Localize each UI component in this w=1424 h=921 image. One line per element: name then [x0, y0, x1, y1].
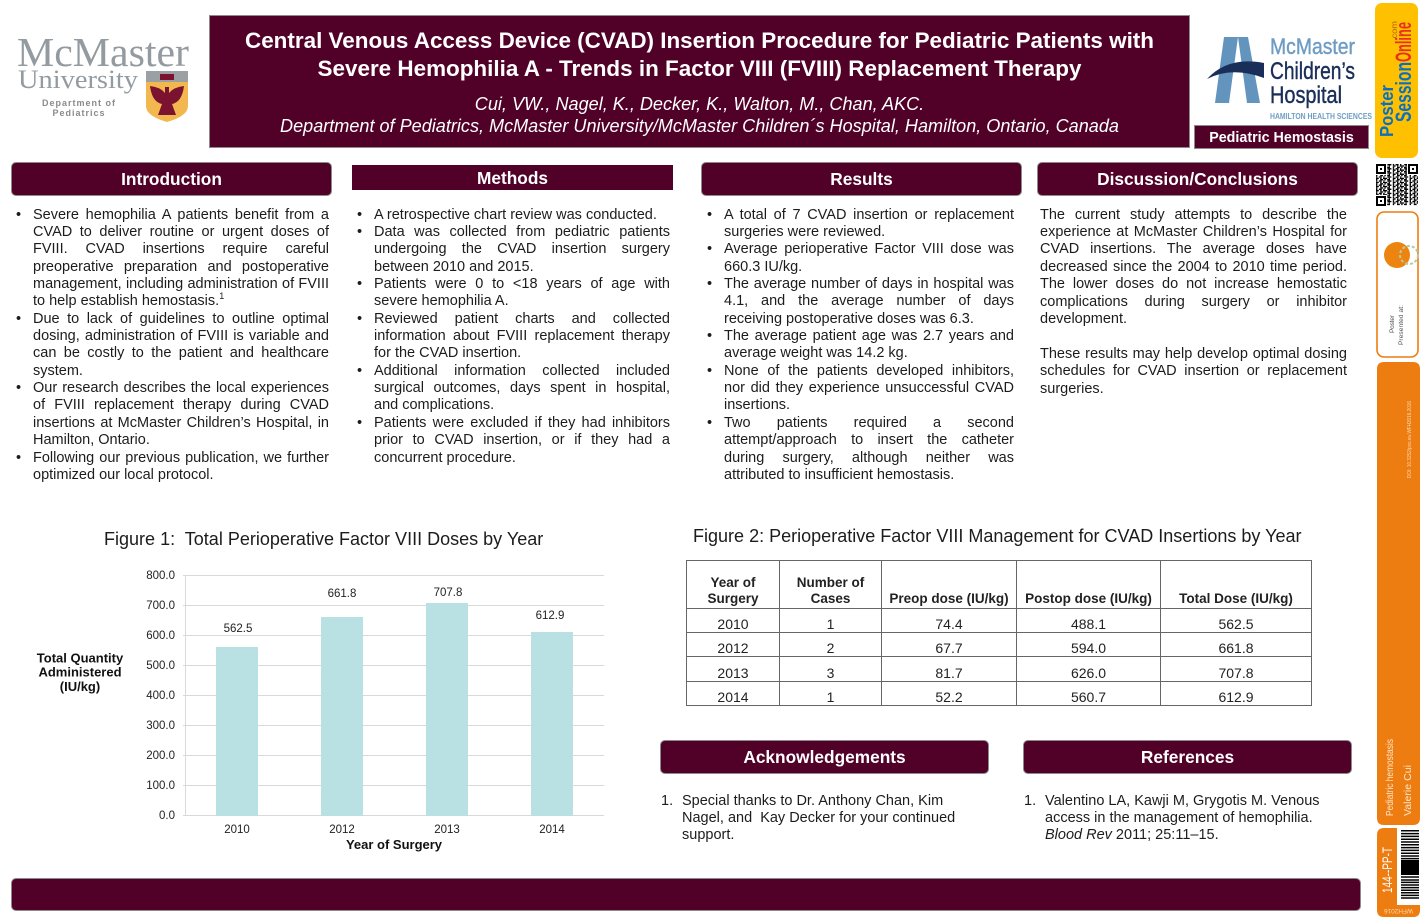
text: results bullets: surgeries were reviewed. [724, 224, 885, 240]
text: discussion paragraphs [1040, 206, 1347, 397]
text: results bullets: attempt/approach to insert the catheter [724, 432, 1014, 448]
heading: Results [701, 162, 1022, 196]
text: discussion paragraphs: These results may help develop optimal dosing [1040, 346, 1347, 362]
table: factor VIII management by year: 2 [827, 640, 834, 656]
text: discussion paragraphs: surgeries. [1040, 381, 1104, 397]
logo: McMaster Children's Hospital: Hospital [1270, 82, 1342, 109]
table: factor VIII management by year: 488.1 [1071, 616, 1106, 632]
y-axis tick labels: 100.0 [146, 780, 175, 792]
text: methods bullets [358, 206, 670, 466]
panel: DOI and poster details: Pediatric hemostasis [1384, 739, 1396, 816]
panel: poster number and barcode: 144--PP-T [1380, 847, 1395, 893]
panel: DOI and poster details: Valerie Cui [1402, 765, 1414, 816]
y-axis tick labels: 300.0 [146, 720, 175, 732]
text: methods bullets: Data was collected from pediatric patients [374, 224, 670, 240]
panel: presented at [1377, 212, 1418, 357]
table: factor VIII management by year: 2012 [717, 640, 749, 656]
text: results bullets: The average patient age was 2.7 years and [724, 328, 1014, 344]
text: discussion paragraphs: development. [1040, 311, 1127, 327]
table: factor VIII management by year: 67.7 [935, 640, 963, 656]
heading: Introduction [11, 162, 332, 196]
value labels: 661.8 [328, 588, 356, 600]
panel: poster number and barcode: WFH2016 [1384, 907, 1413, 914]
text: methods bullets: and complications. [374, 397, 494, 413]
panel: presented at: Poster [1389, 314, 1396, 333]
heading: Acknowledgements: Acknowledgements [743, 747, 906, 767]
text: introduction bullets: can be costly to the patient and healthcare [33, 345, 329, 361]
panel: poster number and barcode [1377, 828, 1420, 917]
value labels [224, 587, 564, 635]
text: discussion paragraphs: schedules for CVAD insertion or replacement [1040, 363, 1347, 379]
table: factor VIII management by year: Postop dose (IU/kg) [1025, 591, 1152, 606]
text: 1. [1024, 792, 1036, 808]
text: methods bullets: concurrent procedure. [374, 450, 516, 466]
heading: Methods: Methods [477, 168, 548, 188]
table: factor VIII management by year: 661.8 [1218, 640, 1254, 656]
badge: PosterSessionOnline: Poster [1377, 85, 1397, 137]
axis titles: Total Quantity [37, 650, 124, 666]
axis titles: Year of Surgery [346, 837, 443, 852]
poster title: Severe Hemophilia A - Trends in Factor VIII (FVIII) Replacement Therapy [318, 56, 1081, 80]
y-axis tick labels: 700.0 [146, 600, 175, 612]
text: discussion paragraphs: experience at McMaster Children’s Hospital for [1040, 224, 1347, 240]
table: factor VIII management by year: 3 [827, 665, 834, 681]
authors and affiliation: Department of Pediatrics, McMaster University/McMaster Children´s Hospital, Hamilton, Ontario, Canada [280, 116, 1119, 136]
panel: DOI and poster details: DOI: 10.3252/pso.eu.WFH2016.2016 [1407, 401, 1413, 478]
table: factor VIII management by year: 2014 [717, 689, 749, 705]
heading: References: References [1141, 747, 1234, 767]
table: factor VIII management by year: 1 [827, 616, 834, 632]
axis titles [37, 650, 443, 852]
QR code [1376, 164, 1418, 206]
y-axis tick labels [146, 570, 175, 822]
logo: McMaster Children's Hospital: Children’s [1270, 58, 1355, 85]
heading: Methods [352, 165, 673, 190]
authors and affiliation: Cui, VW., Nagel, K., Decker, K., Walton, M., Chan, AKC. [475, 94, 924, 114]
logo: McMaster University Department of Pediatrics: McMaster [17, 30, 189, 75]
heading: Figure 2: Figure 2: Perioperative Factor VIII Management for CVAD Insertions by Year [693, 526, 1301, 546]
text: methods bullets: Additional information collected included [374, 363, 670, 379]
table: factor VIII management by year: 562.5 [1218, 616, 1254, 632]
text: introduction bullets: Our research describes the local experiences [33, 380, 329, 396]
text: methods bullets: undergoing the CVAD insertion surgery [374, 241, 670, 257]
text: methods bullets: severe hemophilia A. [374, 293, 509, 309]
y-axis tick labels: 600.0 [146, 630, 175, 642]
y-axis tick labels: 400.0 [146, 690, 175, 702]
text: introduction bullets: of FVIII replacement therapy during CVAD [33, 397, 329, 413]
text: references [1024, 792, 1320, 843]
text: discussion paragraphs: CVAD insertions. The average doses have [1040, 241, 1347, 257]
text: discussion paragraphs: decreased since the 2004 to 2010 time period. [1040, 259, 1347, 275]
x-axis labels [224, 824, 565, 836]
logo: McMaster University Department of Pediatrics: Department of [42, 98, 116, 108]
table: factor VIII management by year: 594.0 [1071, 640, 1106, 656]
text: results bullets: receiving postoperative doses was 6.3. [724, 311, 974, 327]
y-axis tick labels: 0.0 [159, 810, 175, 822]
text: methods bullets: for the CVAD insertion. [374, 345, 521, 361]
table: factor VIII management by year: Total Dose (IU/kg) [1179, 591, 1293, 606]
text: acknowledgements: Nagel, and Kay Decker for your continued [682, 810, 955, 826]
x-axis labels: 2010 [224, 824, 250, 836]
logo: McMaster University Department of Pediatrics: Pediatrics [52, 108, 106, 118]
text: results bullets: Two patients required a second [724, 415, 1014, 431]
axis titles: (IU/kg) [60, 679, 100, 694]
text: introduction bullets: FVIII. CVAD insertions require careful [33, 241, 329, 257]
logo: McMaster Children's Hospital: McMaster [1270, 34, 1355, 59]
logo: McMaster Children's Hospital [1207, 34, 1372, 121]
text: introduction bullets: Hamilton, Ontario. [33, 432, 150, 448]
sidebar: PosterSessionOnline strip [1375, 3, 1420, 917]
text: results bullets: A total of 7 CVAD insertion or replacement [724, 206, 1014, 222]
text: results bullets: insertions. [724, 397, 790, 413]
table: factor VIII management by year: Surgery [707, 591, 759, 606]
axis titles: Administered [38, 664, 122, 680]
text: results bullets: 660.3 IU/kg. [724, 259, 802, 275]
text: discussion paragraphs: complications during surgery or inhibitor [1040, 294, 1347, 310]
table: factor VIII management by year: Year of [710, 575, 756, 590]
poster title [245, 28, 1154, 80]
text: results bullets: The average number of days in hospital was [724, 276, 1014, 292]
heading: Results: Results [830, 169, 893, 189]
text: references: access in the management of hemophilia. [1045, 810, 1313, 826]
table: factor VIII management by year: 707.8 [1218, 665, 1254, 681]
text: results bullets: 4.1, and the average number of days [724, 293, 1014, 309]
text: introduction bullets: system. [33, 363, 83, 379]
heading: Figure 1: Figure 1: Total Perioperative Factor VIII Doses by Year [104, 529, 543, 549]
table: factor VIII management by year: Preop dose (IU/kg) [889, 591, 1009, 606]
text: acknowledgements: support. [682, 827, 734, 843]
text: introduction bullets: Following our previous publication, we further [33, 450, 329, 466]
table: factor VIII management by year: 560.7 [1071, 689, 1106, 705]
value labels: 562.5 [224, 623, 252, 635]
text: introduction bullets: insertions at McMaster Children’s Hospital, in [33, 415, 329, 431]
text: methods bullets: between 2010 and 2015. [374, 259, 534, 275]
table: factor VIII management by year: 2013 [717, 665, 749, 681]
panel: DOI and poster details [1377, 362, 1420, 825]
x-axis labels: 2014 [539, 824, 565, 836]
text: methods bullets: Reviewed patient charts and collected [374, 311, 670, 327]
track label: Pediatric Hemostasis [1194, 125, 1369, 149]
text: results bullets: attributed to insufficient hemostasis. [724, 467, 954, 483]
logo: McMaster University Department of Pediatrics [17, 30, 189, 122]
text: results bullets: during surgery, although neither was [724, 450, 1014, 466]
poster title: Central Venous Access Device (CVAD) Insertion Procedure for Pediatric Patients with [245, 28, 1154, 53]
text: introduction bullets: dosing, administration of FVIII is variable and [33, 328, 329, 344]
bar chart: total perioperative doses by year [36, 570, 604, 852]
table: factor VIII management by year: Number of [797, 575, 864, 590]
table: factor VIII management by year: 612.9 [1218, 689, 1254, 705]
title banner [209, 15, 1190, 148]
heading: Discussion/Conclusions [1037, 162, 1358, 196]
value labels: 612.9 [536, 610, 564, 622]
y-axis tick labels: 200.0 [146, 750, 175, 762]
text: results bullets: nor did they experience unsuccessful CVAD [724, 380, 1014, 396]
text: results bullets: average weight was 14.2 kg. [724, 345, 908, 361]
panel: presented at: Presented at: [1398, 305, 1405, 345]
text: acknowledgements [661, 792, 955, 843]
text: results bullets: Average perioperative Factor VIII dose was [724, 241, 1014, 257]
value labels: 707.8 [434, 587, 462, 599]
heading: References [1023, 740, 1352, 774]
x-axis labels: 2013 [434, 824, 460, 836]
text: introduction bullets [16, 206, 330, 483]
text: introduction bullets: Due to lack of guidelines to outline optimal [33, 311, 329, 327]
y-axis tick labels: 500.0 [146, 660, 175, 672]
text: methods bullets: Patients were 0 to <18 years of age with [374, 276, 670, 292]
x-axis labels: 2012 [329, 824, 355, 836]
table: factor VIII management by year: 626.0 [1071, 665, 1106, 681]
table: factor VIII management by year: Cases [811, 591, 850, 606]
table: factor VIII management by year: 81.7 [935, 665, 963, 681]
text: introduction bullets: optimized our local protocol. [33, 467, 214, 483]
track label: Pediatric Hemostasis: Pediatric Hemostasis [1209, 130, 1354, 146]
text: results bullets [708, 206, 1014, 483]
table: factor VIII management by year [686, 560, 1312, 706]
text: discussion paragraphs: The current study attempts to describe the [1040, 206, 1347, 222]
authors and affiliation [280, 94, 1119, 136]
text: discussion paragraphs: The lower doses do not increase hemostatic [1040, 276, 1347, 292]
text: methods bullets: information about FVIII replacement therapy [374, 328, 670, 344]
text: 1. [661, 792, 673, 808]
table: factor VIII management by year: 2010 [717, 616, 749, 632]
text: acknowledgements: Special thanks to Dr. Anthony Chan, Kim [682, 792, 943, 808]
text: references: Blood Rev 2011; 25:11–15. [1045, 827, 1219, 843]
text: references: Valentino LA, Kawji M, Grygotis M. Venous [1045, 792, 1320, 808]
text: methods bullets: surgical outcomes, days spent in hospital, [374, 380, 670, 396]
logo: McMaster University Department of Pediatrics: University [18, 65, 138, 94]
text: introduction bullets: preoperative preparation and postoperative [33, 259, 329, 275]
footer bar [11, 878, 1361, 911]
text: results bullets: None of the patients developed inhibitors, [724, 363, 1014, 379]
heading: Discussion/Conclusions: Discussion/Conclusions [1097, 169, 1298, 189]
table: factor VIII management by year: 74.4 [935, 616, 963, 632]
badge: PosterSessionOnline: Session [1391, 62, 1416, 122]
heading: Acknowledgements [660, 740, 989, 774]
text: introduction bullets: management, including administration of FVIII [33, 276, 329, 292]
text: methods bullets: A retrospective chart review was conducted. [374, 206, 657, 222]
table: factor VIII management by year: 52.2 [935, 689, 963, 705]
heading: Introduction: Introduction [121, 169, 222, 189]
table: factor VIII management by year: 1 [827, 689, 834, 705]
y-axis tick labels: 800.0 [146, 570, 175, 582]
text: introduction bullets: to help establish hemostasis.1 [33, 291, 224, 309]
text: methods bullets: Patients were excluded if they had inhibitors [374, 415, 670, 431]
badge: PosterSessionOnline: .com [1390, 21, 1399, 41]
bars [216, 603, 573, 816]
text: methods bullets: prior to CVAD insertion, or if they had a [374, 432, 670, 448]
badge: PosterSessionOnline [1375, 3, 1418, 158]
text: introduction bullets: CVAD to deliver routine or urgent doses of [33, 224, 329, 240]
text: introduction bullets: Severe hemophilia A patients benefit from a [33, 206, 329, 222]
